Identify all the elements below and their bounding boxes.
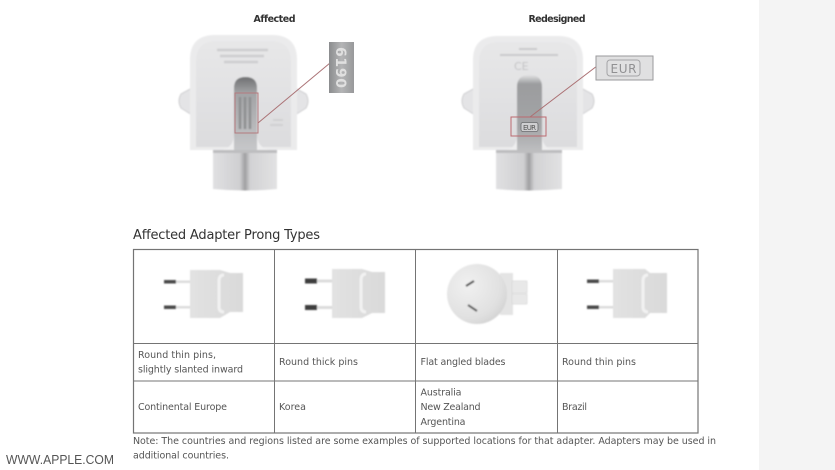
text: CE mark: CE (514, 60, 529, 73)
callout: leader line (530, 66, 597, 117)
callout: magnified EUR (596, 56, 653, 80)
row: countries (138, 388, 587, 428)
row: prong descriptions: Round thick pins (279, 357, 358, 368)
callout: magnified code: 6190 (332, 47, 348, 88)
row: countries: Brazil (562, 402, 587, 413)
callout: red marker box (235, 93, 258, 133)
source credit: WWW.APPLE.COM (6, 452, 114, 467)
callout: magnified code (329, 42, 354, 93)
note text: Note: The countries and regions listed are some examples of supported locations for that adapter. Adapters may be used in (133, 436, 716, 447)
text: EUR marking (521, 122, 538, 132)
text: EUR marking: EUR (523, 124, 536, 132)
row: countries: Argentina (420, 417, 466, 428)
redesigned adapter photo (462, 36, 653, 190)
callout: magnified EUR: EUR (610, 62, 636, 76)
row: prong descriptions (138, 350, 636, 376)
row: prong descriptions: Round thin pins (562, 357, 636, 368)
row: countries: Australia (420, 388, 462, 398)
icon: flat angled blades adapter (447, 264, 527, 324)
row: countries: Korea (279, 402, 306, 413)
row: countries: Continental Europe (138, 402, 227, 413)
icon: round thin pins adapter, Brazil (587, 269, 667, 318)
section heading: Affected Adapter Prong Types (133, 228, 320, 243)
note text: additional countries. (133, 450, 229, 462)
row: prong descriptions: Flat angled blades (420, 357, 506, 368)
callout: red marker box (511, 117, 546, 136)
table: adapter prong types (134, 250, 698, 433)
icon: round thick pins adapter (305, 269, 385, 318)
row: countries: New Zealand (420, 402, 480, 413)
note text (133, 436, 716, 462)
row: prong descriptions: slightly slanted inward (138, 364, 243, 376)
affected adapter photo (179, 35, 354, 190)
icon: round thin pins adapter (164, 270, 243, 318)
heading: Redesigned: Redesigned (528, 14, 586, 25)
callout: leader line (258, 63, 330, 123)
sidebar panel (759, 0, 835, 470)
row: prong descriptions: Round thin pins, (138, 350, 216, 361)
heading: Affected: Affected (254, 14, 296, 25)
